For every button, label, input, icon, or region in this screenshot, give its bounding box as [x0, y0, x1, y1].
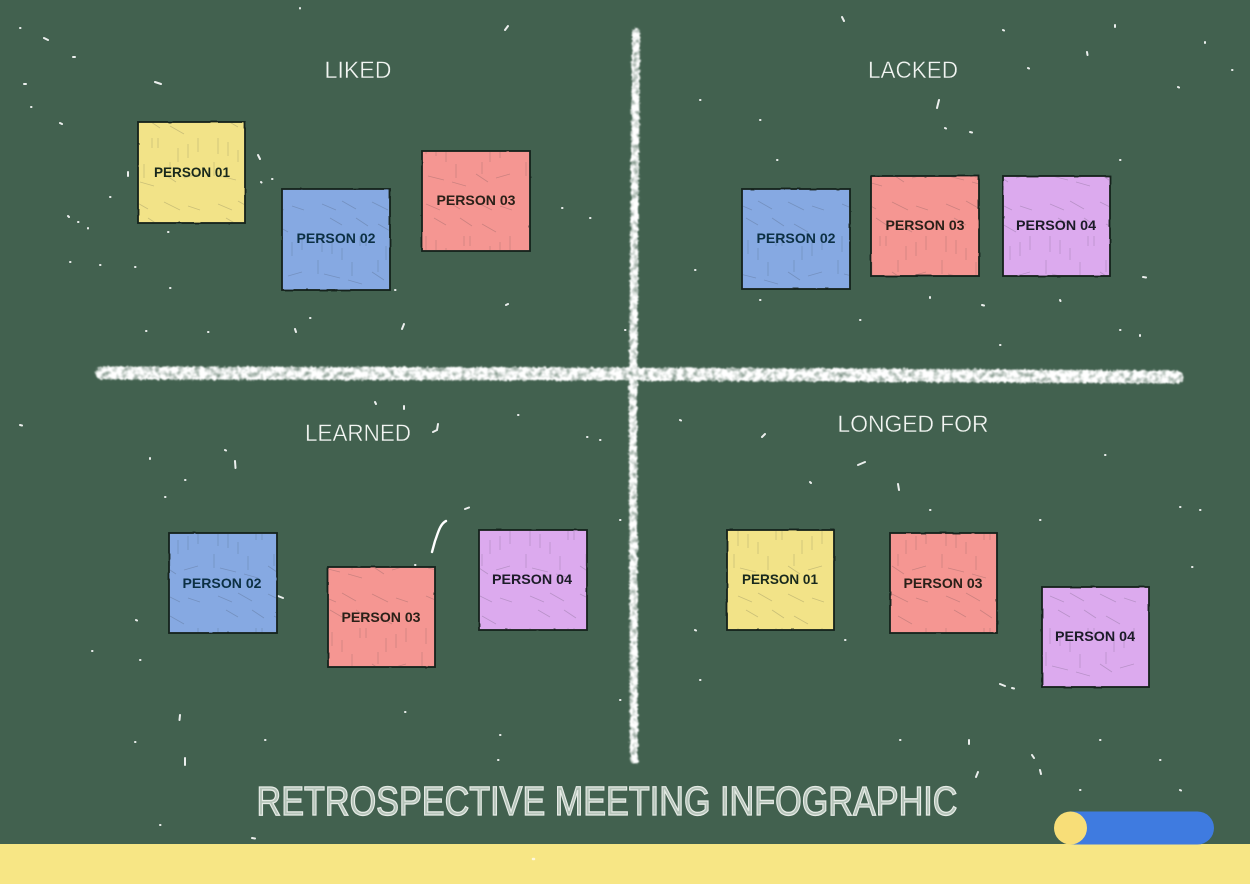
horizontal chalk line — [102, 373, 1177, 377]
note: person 01: PERSON 01 — [154, 164, 230, 180]
panel: longed for notes — [727, 530, 1149, 687]
note: person 02 — [169, 533, 277, 633]
note: person 04: PERSON 04 — [1016, 217, 1096, 233]
note: person 04: PERSON 04 — [1055, 628, 1135, 644]
note: person 02 — [282, 189, 390, 290]
heading: liked: LIKED — [324, 57, 392, 84]
vertical chalk line — [633, 32, 636, 760]
note: person 02 — [742, 189, 850, 289]
title: RETROSPECTIVE MEETING INFOGRAPHIC — [256, 778, 958, 824]
note: person 03: PERSON 03 — [904, 575, 983, 591]
panel: lacked notes — [742, 176, 1110, 289]
note: person 01: PERSON 01 — [742, 571, 818, 587]
note: person 04 — [479, 530, 587, 630]
note: person 03: PERSON 03 — [342, 609, 421, 625]
note: person 04 — [1042, 587, 1149, 687]
heading: lacked: LACKED — [868, 57, 958, 84]
pill — [1070, 812, 1214, 844]
note: person 03 — [328, 567, 435, 667]
yellow footer band — [0, 844, 1250, 884]
heading: longed for: LONGED FOR — [838, 411, 988, 438]
note: person 02: PERSON 02 — [756, 230, 836, 246]
note: person 01 — [727, 530, 834, 630]
note: person 03: PERSON 03 — [886, 217, 965, 233]
note: person 03 — [871, 176, 979, 276]
note: person 02: PERSON 02 — [182, 575, 262, 591]
note: person 03 — [422, 151, 530, 251]
panel: liked notes — [138, 122, 530, 290]
note: person 04 — [1003, 176, 1110, 276]
blue pill toggle — [1054, 812, 1214, 844]
panel: learned notes — [169, 530, 587, 667]
note: person 03: PERSON 03 — [436, 192, 516, 208]
note: person 03 — [890, 533, 997, 633]
heading: learned: LEARNED — [305, 420, 411, 447]
note: person 01 — [138, 122, 245, 223]
note: person 04: PERSON 04 — [492, 571, 572, 587]
chalk cross divider — [102, 32, 1177, 760]
toggle knob — [1054, 812, 1087, 844]
note: person 02: PERSON 02 — [296, 230, 376, 246]
